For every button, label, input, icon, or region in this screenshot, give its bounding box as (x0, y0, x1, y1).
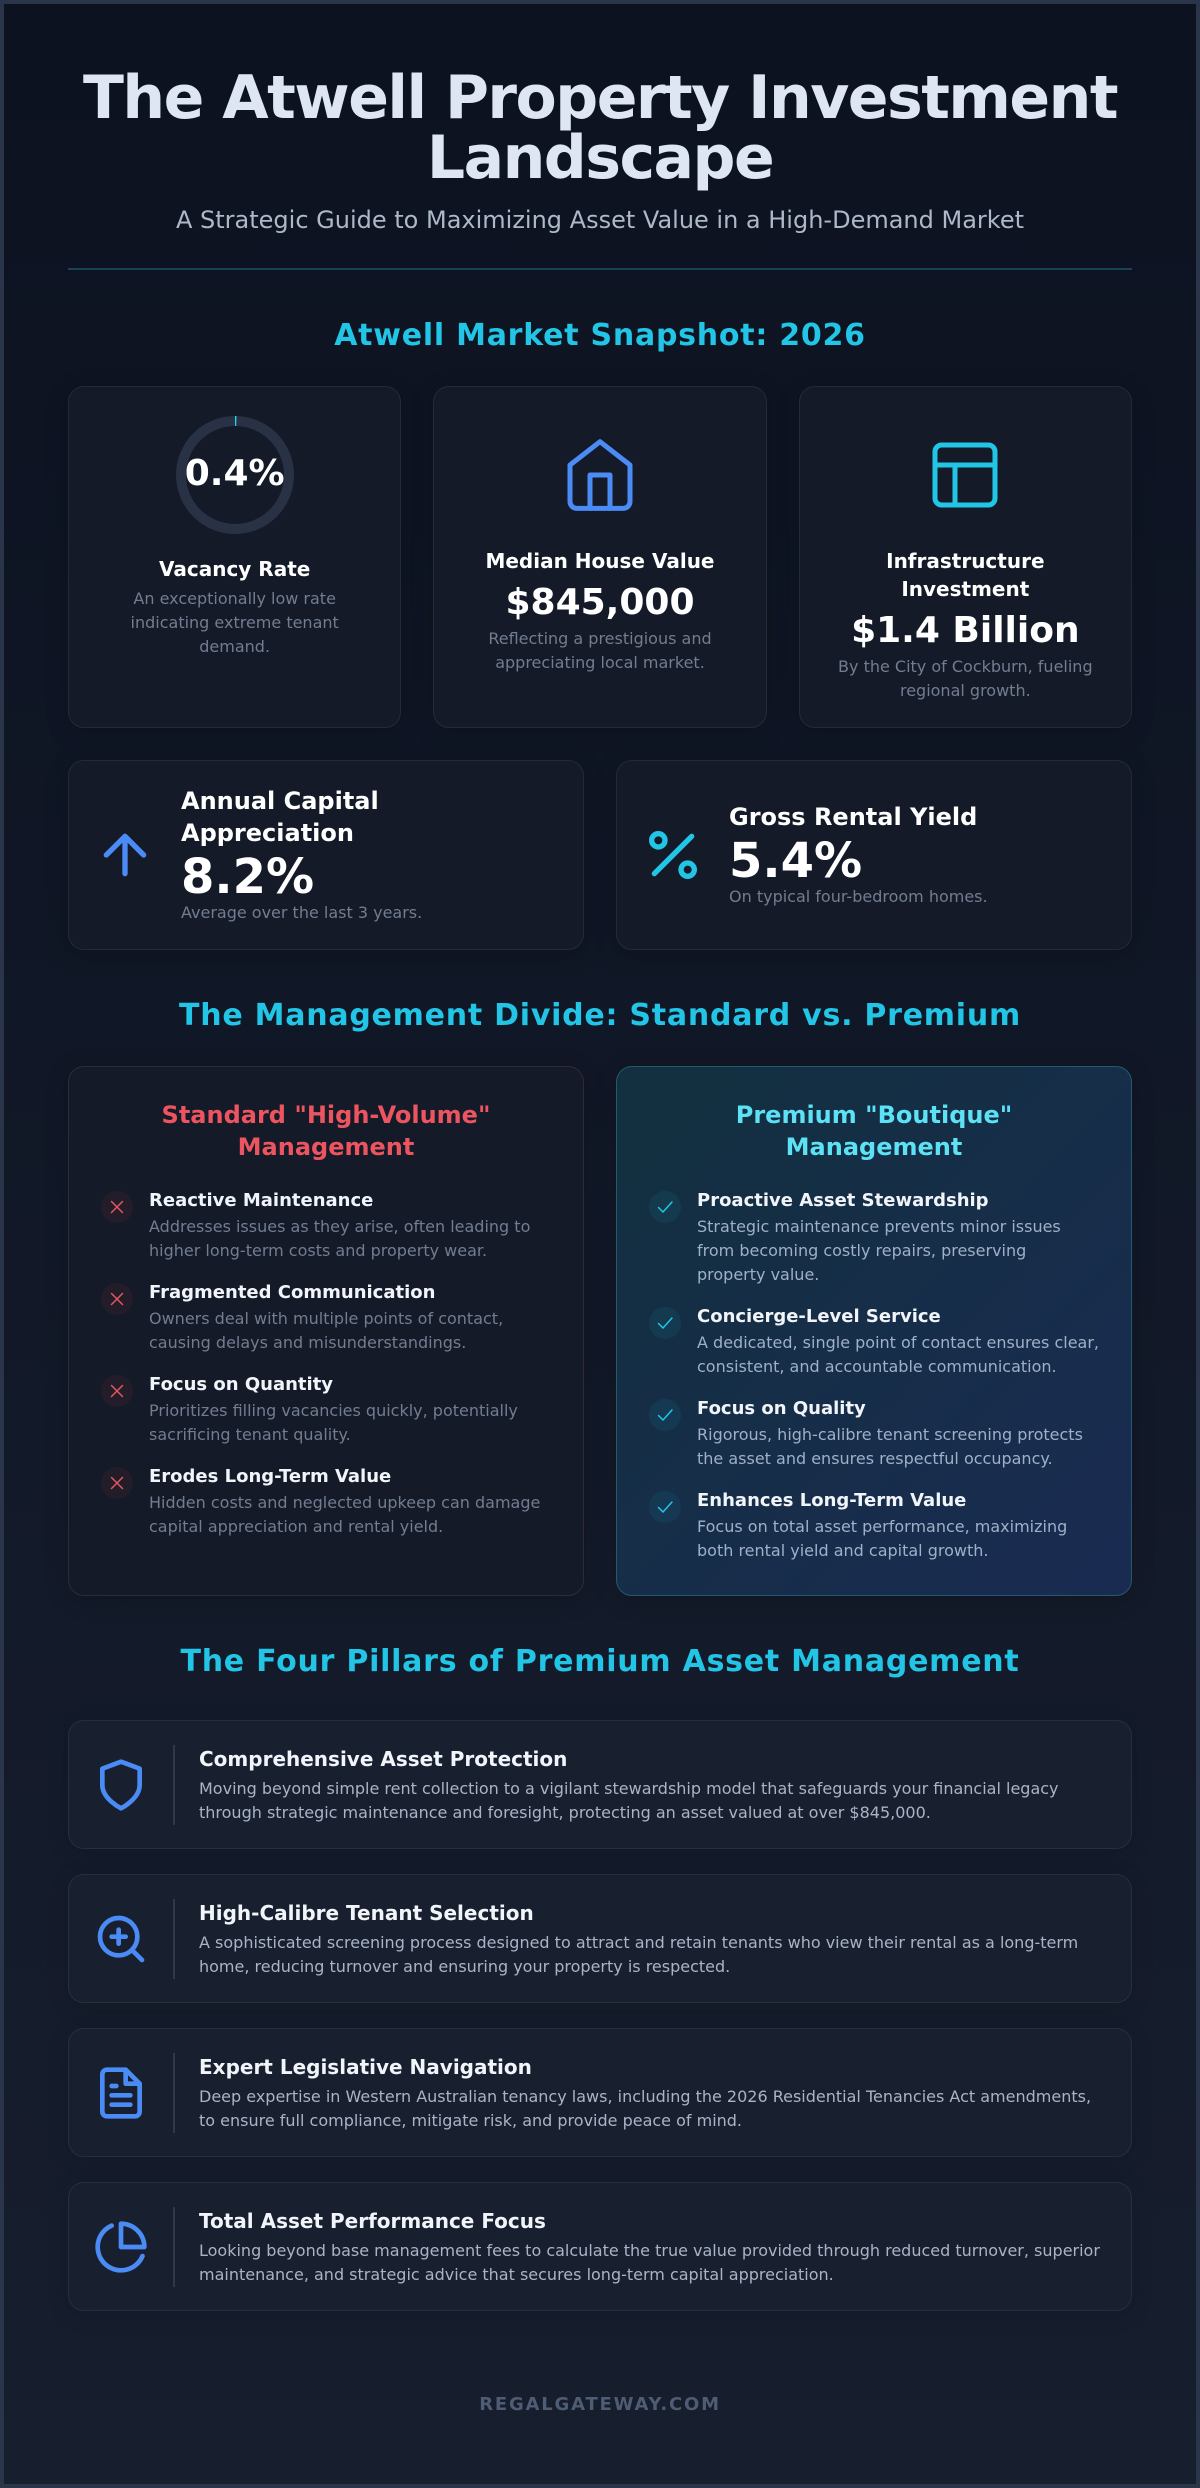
value: house value: $845,000 (505, 582, 694, 623)
panel: premium management (616, 1066, 1132, 1596)
pillar description (199, 2087, 1091, 2130)
description: infrastructure: regional growth. (900, 681, 1031, 700)
item: focus on quality (649, 1398, 1083, 1468)
description: infrastructure: By the City of Cockburn, fueling (838, 657, 1093, 676)
panel: infrastructure investment (799, 386, 1132, 728)
heading: market snapshot: Atwell Market Snapshot: 2026 (334, 318, 866, 353)
item: erodes long-term value: Hidden costs and neglected upkeep can damage (149, 1493, 540, 1512)
item: focus on quantity: Focus on Quantity (149, 1374, 333, 1395)
description: house value (488, 629, 712, 672)
pillar description: A sophisticated screening process designed to attract and retain tenants who view their rental as a long-term (199, 1933, 1078, 1952)
label: infrastructure (886, 549, 1045, 601)
label: appreciation (181, 787, 379, 847)
item: focus on quantity: sacrificing tenant quality. (149, 1425, 351, 1444)
icon: pie chart (95, 2221, 147, 2273)
label: infrastructure: Infrastructure (886, 549, 1045, 573)
description: vacancy: An exceptionally low rate (133, 589, 336, 608)
value: infrastructure: $1.4 Billion (851, 610, 1080, 651)
item: enhances long-term value (649, 1490, 1067, 1560)
pillar title: Comprehensive Asset Protection (199, 1747, 567, 1771)
icon: arrow up (104, 834, 146, 876)
value: vacancy: 0.4% (185, 453, 285, 494)
item: focus on quantity (101, 1374, 518, 1444)
item: focus on quality: Rigorous, high-calibre tenant screening protects (697, 1425, 1083, 1444)
pillar description: through strategic maintenance and foresight, protecting an asset valued at over $845,000. (199, 1803, 931, 1822)
item: focus on quality: the asset and ensures respectful occupancy. (697, 1449, 1053, 1468)
value: yield: 5.4% (729, 833, 862, 889)
footer: REGALGATEWAY.COM (479, 2394, 721, 2415)
icon: document (100, 2067, 142, 2119)
heading: premium (736, 1101, 1012, 1161)
item: proactive asset stewardship: Proactive Asset Stewardship (697, 1190, 989, 1211)
pillar title: Total Asset Performance Focus (199, 2209, 546, 2233)
item: reactive maintenance: Reactive Maintenance (149, 1190, 373, 1211)
description: vacancy (131, 589, 339, 656)
icon: shield (100, 1759, 142, 1811)
chart: vacancy ring (176, 416, 294, 534)
pillar description: Deep expertise in Western Australian tenancy laws, including the 2026 Residential Tenancies Act amendments, (199, 2087, 1091, 2106)
item: focus on quality: Focus on Quality (697, 1398, 866, 1419)
subtitle: A Strategic Guide to Maximizing Asset Value in a High-Demand Market (176, 206, 1024, 234)
item: focus on quantity: Prioritizes filling vacancies quickly, potentially (149, 1401, 518, 1420)
icon: percent (649, 831, 697, 879)
icon: check (649, 1491, 681, 1523)
pillar title: High-Calibre Tenant Selection (199, 1901, 534, 1925)
heading: premium: Management (786, 1133, 962, 1161)
panel: comprehensive asset protection (68, 1720, 1132, 1849)
pillar description (199, 1933, 1078, 1976)
icon: zoom in (98, 1916, 144, 1962)
panel: expert legislative navigation (68, 2028, 1132, 2157)
item: concierge-level service (649, 1306, 1099, 1376)
item: reactive maintenance: higher long-term costs and property wear. (149, 1241, 487, 1260)
heading: premium: Premium "Boutique" (736, 1101, 1012, 1129)
panel: vacancy rate (68, 386, 401, 728)
label: appreciation: Appreciation (181, 819, 354, 847)
heading: standard: Standard "High-Volume" (162, 1101, 490, 1129)
title: The Atwell Property Investment (83, 63, 1117, 133)
value: appreciation: 8.2% (181, 849, 314, 905)
pillar description: Looking beyond base management fees to calculate the true value provided through reduced turnover, superior (199, 2241, 1100, 2260)
item: erodes long-term value (101, 1466, 540, 1536)
pillar description: to ensure full compliance, mitigate risk, and provide peace of mind. (199, 2111, 742, 2130)
panel: median house value (433, 386, 767, 728)
description: house value: Reflecting a prestigious and (488, 629, 712, 648)
icon: check (649, 1191, 681, 1223)
item: reactive maintenance: Addresses issues as they arise, often leading to (149, 1217, 530, 1236)
icon: check (649, 1307, 681, 1339)
pillar description: home, reducing turnover and ensuring your property is respected. (199, 1957, 730, 1976)
pillar title: Expert Legislative Navigation (199, 2055, 532, 2079)
panel: high-calibre tenant selection (68, 1874, 1132, 2003)
pillar description (199, 2241, 1100, 2284)
panel: gross rental yield (616, 760, 1132, 950)
description: yield: On typical four-bedroom homes. (729, 887, 988, 906)
item: concierge-level service: consistent, and accountable communication. (697, 1357, 1057, 1376)
item: proactive asset stewardship (649, 1190, 1061, 1284)
item: enhances long-term value: both rental yield and capital growth. (697, 1541, 988, 1560)
item: proactive asset stewardship: property value. (697, 1265, 819, 1284)
item: concierge-level service: A dedicated, single point of contact ensures clear, (697, 1333, 1099, 1352)
heading: four pillars: The Four Pillars of Premium Asset Management (180, 1644, 1020, 1679)
description: vacancy: indicating extreme tenant (131, 613, 339, 632)
label: yield: Gross Rental Yield (729, 803, 977, 831)
label: appreciation: Annual Capital (181, 787, 379, 815)
description: appreciation: Average over the last 3 years. (181, 903, 422, 922)
title: Landscape (427, 123, 773, 193)
item: concierge-level service: Concierge-Level Service (697, 1306, 941, 1327)
item: erodes long-term value: capital appreciation and rental yield. (149, 1517, 443, 1536)
icon: house (568, 439, 632, 511)
label: vacancy rate: Vacancy Rate (159, 557, 310, 581)
heading: standard: Management (238, 1133, 414, 1161)
item: reactive maintenance (101, 1190, 530, 1260)
panel: annual capital appreciation (68, 760, 584, 950)
item: erodes long-term value: Erodes Long-Term Value (149, 1466, 391, 1487)
item: fragmented communication: Owners deal with multiple points of contact, (149, 1309, 503, 1328)
title (83, 63, 1118, 193)
heading: management divide: The Management Divide: Standard vs. Premium (179, 998, 1021, 1033)
pillar description: Moving beyond simple rent collection to a vigilant stewardship model that safeguards your financial legacy (199, 1779, 1059, 1798)
label: median house value: Median House Value (485, 549, 714, 573)
icon: layout (932, 442, 998, 508)
icon: cross (101, 1191, 133, 1223)
description: house value: appreciating local market. (495, 653, 705, 672)
icon: check (649, 1399, 681, 1431)
icon: cross (101, 1467, 133, 1499)
panel: total asset performance focus (68, 2182, 1132, 2311)
description: infrastructure (838, 657, 1093, 700)
pillar description: maintenance, and strategic advice that secures long-term capital appreciation. (199, 2265, 834, 2284)
item: fragmented communication (101, 1282, 503, 1352)
item: proactive asset stewardship: from becoming costly repairs, preserving (697, 1241, 1026, 1260)
item: enhances long-term value: Enhances Long-Term Value (697, 1490, 966, 1511)
pillar description (199, 1779, 1059, 1822)
heading: standard (162, 1101, 490, 1161)
panel: standard management (68, 1066, 584, 1596)
item: fragmented communication: causing delays and misunderstandings. (149, 1333, 466, 1352)
label: infrastructure: Investment (901, 577, 1029, 601)
item: fragmented communication: Fragmented Communication (149, 1282, 435, 1303)
item: enhances long-term value: Focus on total asset performance, maximizing (697, 1517, 1067, 1536)
icon: cross (101, 1283, 133, 1315)
icon: cross (101, 1375, 133, 1407)
description: vacancy: demand. (199, 637, 270, 656)
item: proactive asset stewardship: Strategic maintenance prevents minor issues (697, 1217, 1061, 1236)
